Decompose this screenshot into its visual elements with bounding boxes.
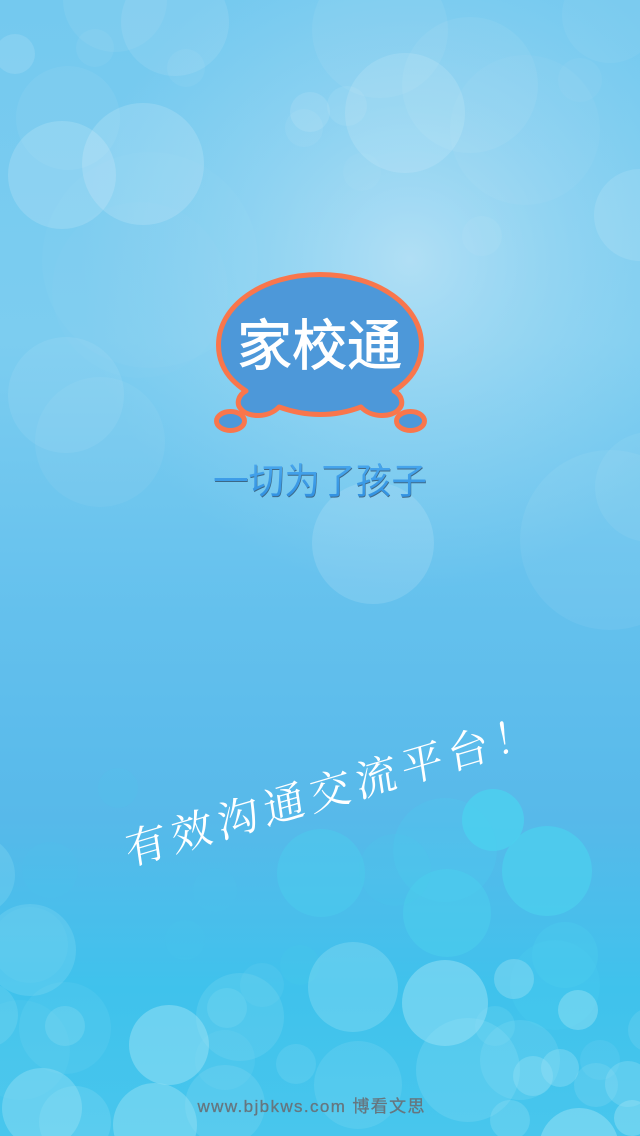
bottom light circles [0,835,640,1136]
top bokeh circles [0,0,640,630]
left foot [216,412,244,430]
handwritten tagline: 有效沟通交流平台！ [122,707,538,875]
bottom bokeh circles [22,768,600,1030]
slogan: 一切为了孩子 [213,460,427,502]
slogan: 一切为了孩子 [214,462,428,502]
footer website: www.bjbkws.com 博看文思 [196,1097,424,1116]
right foot [396,412,424,430]
logo: speech bubble [216,274,424,430]
bubble outline [218,274,422,416]
logo name: 家校通 [237,315,402,377]
